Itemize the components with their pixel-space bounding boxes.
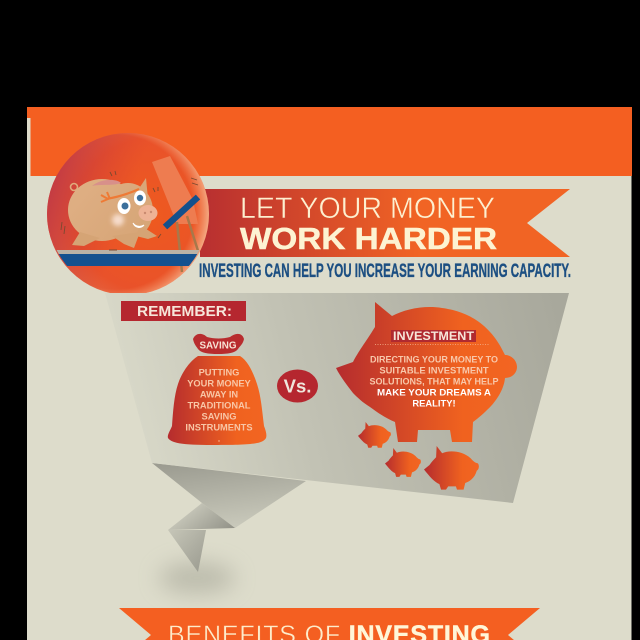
bag body <box>168 356 266 445</box>
headline: let your money: LET YOUR MONEY <box>240 192 495 225</box>
investment description: DIRECTING YOUR MONEY TO <box>370 354 498 364</box>
saving money bag <box>168 334 266 445</box>
saving description: YOUR MONEY <box>187 378 252 388</box>
tail fold 3 <box>168 530 206 572</box>
pig body <box>68 179 136 241</box>
treadmill legs <box>177 216 199 272</box>
smile <box>133 223 144 227</box>
saving description: INSTRUMENTS <box>185 422 253 432</box>
bag knot <box>193 334 244 354</box>
page background panel <box>27 116 632 640</box>
treadmill belt <box>56 250 200 254</box>
versus badge: Vs. <box>284 376 311 396</box>
motion lines <box>61 171 198 250</box>
pig ear <box>138 178 148 199</box>
saving description: PUTTING <box>199 368 239 378</box>
small pig 2 <box>385 448 421 477</box>
treadmill screen glow <box>152 156 198 224</box>
tail fold 2 <box>168 503 235 530</box>
benefits ribbon <box>119 608 540 640</box>
snout <box>138 205 158 221</box>
pig head <box>103 183 153 239</box>
header ribbon <box>200 189 570 257</box>
headband <box>106 189 139 199</box>
right eye <box>134 190 146 206</box>
pig tail <box>70 184 78 190</box>
small pig 1 <box>358 422 391 448</box>
saving description: SAVING <box>202 412 236 422</box>
investment description: SOLUTIONS, THAT MAY HELP <box>370 376 498 386</box>
investment description: MAKE YOUR DREAMS A <box>377 386 491 398</box>
investment large pig <box>336 302 517 442</box>
panel body <box>105 293 569 503</box>
tail fold shadow <box>159 562 235 594</box>
tail fold 1 <box>152 463 306 528</box>
investment title <box>391 330 476 342</box>
investment description: REALITY! <box>412 398 456 408</box>
investment large pig: INVESTMENT <box>393 329 475 343</box>
piggy <box>68 178 158 248</box>
saving description: TRADITIONAL <box>187 400 251 410</box>
investment description: SUITABLE INVESTMENT <box>379 364 489 376</box>
versus badge <box>277 370 318 402</box>
headline: work harder: WORK HARDER <box>240 221 497 256</box>
origami speech panel <box>105 293 569 594</box>
small pig 3 <box>424 446 479 490</box>
remember label: REMEMBER: <box>137 303 232 320</box>
treadmill handle <box>165 197 198 227</box>
coin slot <box>92 180 121 186</box>
piggy treadmill ball icon <box>45 133 210 295</box>
cheek highlight <box>112 214 124 226</box>
top orange band <box>27 107 632 176</box>
investment description <box>370 354 498 408</box>
pig feet <box>72 225 157 248</box>
saving description: AWAY IN <box>200 390 238 400</box>
saving title: SAVING <box>200 340 237 352</box>
left eye <box>118 198 130 214</box>
saving description <box>185 368 253 432</box>
remember label <box>121 301 246 321</box>
